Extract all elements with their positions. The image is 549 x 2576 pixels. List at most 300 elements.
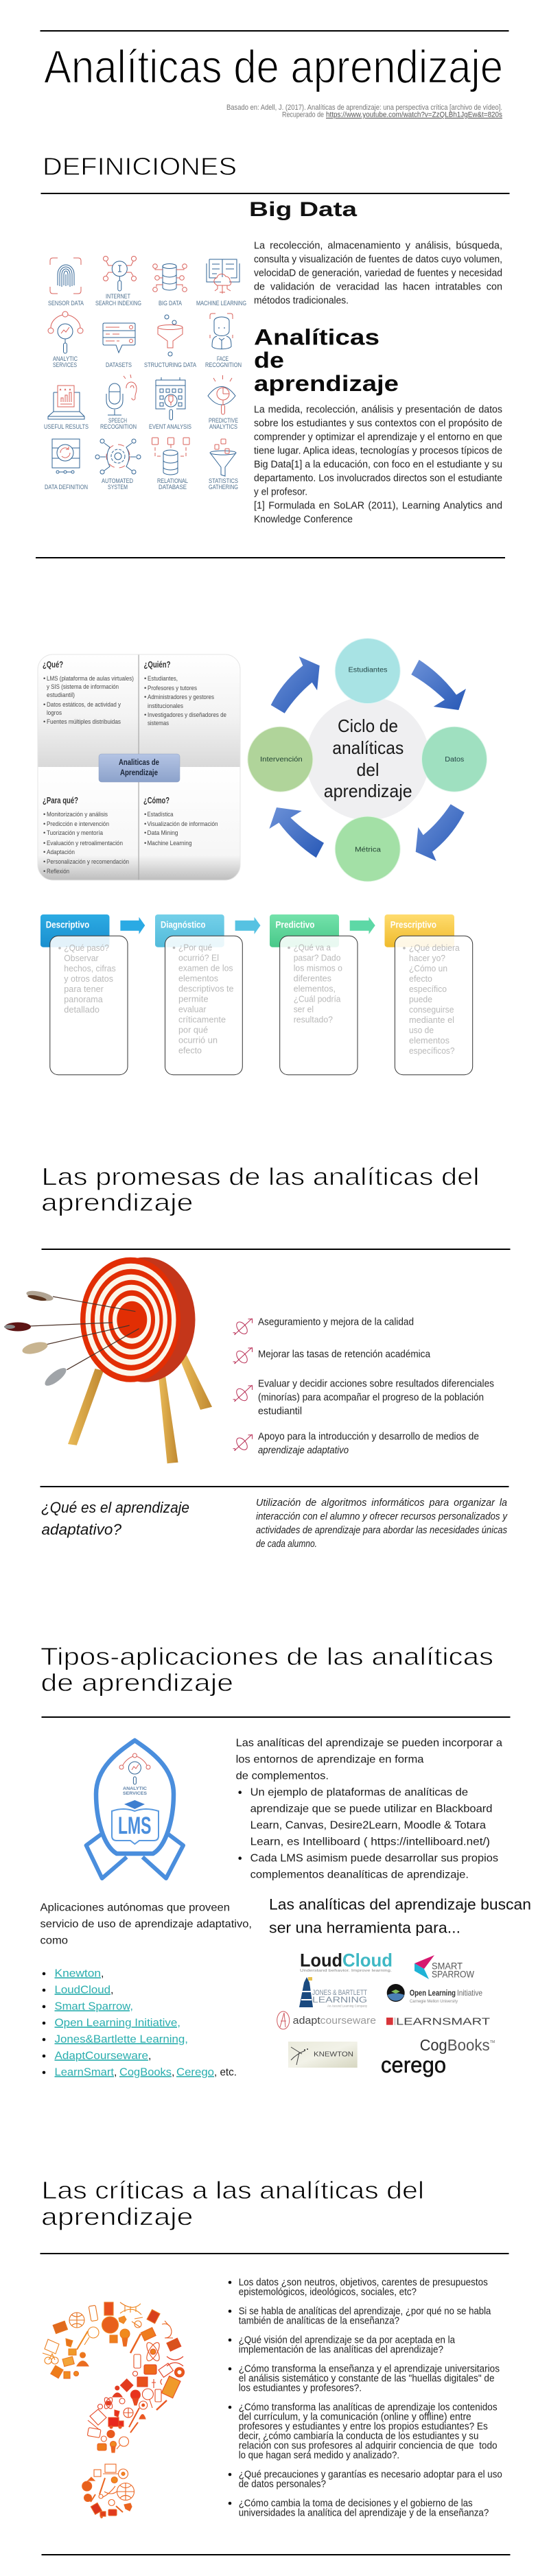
- list: adaptive learning services: CogBooks: [119, 2066, 172, 2078]
- icon: automated system: [95, 439, 141, 491]
- item: evaluar: Evaluar y decidir acciones sobre resultados diferenciales: [258, 1379, 494, 1390]
- arrow: intervención to estudiantes: [271, 657, 320, 713]
- item: datos neutros: [229, 2278, 488, 2298]
- icon: useful results: [44, 386, 89, 430]
- heading: las críticas: [41, 2176, 424, 2230]
- icon: relational database: [152, 438, 189, 491]
- icon: LMS badge: LMS: [118, 1812, 151, 1839]
- logo: open learning initiative: Carnegie Mellon University: [410, 2000, 458, 2004]
- quadrant: para qué: Personalización y recomendación: [47, 858, 129, 866]
- icon: speech recognition: SPEECH: [108, 417, 127, 424]
- logo: loudcloud: [300, 1950, 393, 1973]
- quadrant: qué: •: [43, 701, 45, 709]
- icon: event analysis: EVENT ANALYSIS: [149, 423, 191, 430]
- list: adaptive learning services: Jones&Bartlette Learning,: [55, 2033, 188, 2045]
- step: diagnóstico: evaluar: [178, 1004, 206, 1014]
- node: intervención: [248, 726, 313, 792]
- text: aprendizaje adaptativo definition: actividades de aprendizaje para abordar las necesidades únicas: [256, 1525, 507, 1536]
- logo: cogbooks: Books: [447, 2036, 490, 2054]
- quadrant: quién: •: [144, 711, 146, 719]
- step: diagnóstico: permite: [178, 995, 209, 1004]
- text: aplicaciones autónomas: servicio de uso de aprendizaje adaptativo,: [40, 1918, 252, 1930]
- logo: loudcloud: Cloud: [342, 1950, 393, 1971]
- text: aprendizaje adaptativo definition: de cada alumno.: [256, 1539, 317, 1550]
- arrow: descriptivo to diagnóstico: [120, 917, 145, 934]
- quadrant: para qué: •: [43, 858, 45, 866]
- step: predictivo: ser el: [294, 1004, 314, 1014]
- quadrant: cómo: •: [144, 829, 146, 837]
- icon: automated system: AUTOMATED: [102, 477, 133, 484]
- heading: analíticas de aprendizaje: Analíticas: [254, 325, 379, 350]
- heading: tipos-aplicaciones: Tipos-aplicaciones de las analíticas: [40, 1642, 493, 1670]
- step: diagnóstico: efecto: [178, 1045, 202, 1055]
- item: datos personales: ¿Qué precauciones y garantías es necesario adoptar para el uso: [239, 2470, 502, 2481]
- logo: adaptcourseware: [277, 2011, 376, 2029]
- item: evaluar: [258, 1379, 494, 1417]
- icon: event analysis: [149, 377, 191, 430]
- quadrant: quién: Estudiantes,: [148, 675, 178, 683]
- icon: speech recognition: [100, 375, 137, 430]
- text: analíticas en entornos de aprendizaje: Las analíticas del aprendizaje se pueden incorporar a: [236, 1738, 502, 1749]
- step: prescriptivo: ¿Qué debiera: [409, 943, 460, 953]
- item: huellas digitales: [229, 2363, 500, 2394]
- list: adaptive learning services: ,: [114, 2066, 117, 2078]
- item: analíticas de la enseñanza: [229, 2306, 491, 2326]
- step: descriptivo: [40, 914, 128, 1075]
- step: predictivo: diferentes: [294, 974, 331, 984]
- quadrant: qué: Fuentes múltiples distribuidas: [47, 718, 121, 726]
- text: big data definition: métodos tradicionales.: [254, 296, 349, 307]
- quadrant: quién: [144, 659, 226, 727]
- arrow: estudiantes to datos: [411, 660, 466, 710]
- node: intervención: Intervención: [260, 755, 303, 764]
- step: diagnóstico: elementos: [178, 974, 218, 984]
- item: analíticas de la enseñanza: Si se habla de analíticas del aprendizaje, ¿por qué no se habla: [239, 2306, 491, 2317]
- quadrant: cómo: ¿Cómo?: [143, 795, 170, 805]
- quadrant: qué: [43, 659, 134, 726]
- heading: herramienta: ser una herramienta para...: [269, 1919, 460, 1937]
- quadrant: cómo: Estadística: [147, 811, 174, 818]
- item: contenidos del currículum: del currículum, y la comunicación (online y offline) entre: [239, 2411, 471, 2422]
- text: analíticas en entornos de aprendizaje: complementos deanalíticas de aprendizaje.: [250, 1869, 469, 1881]
- quadrant: para qué: [43, 795, 129, 875]
- step: prescriptivo: efecto: [409, 974, 432, 984]
- quadrant: para qué: Reflexión: [47, 868, 69, 875]
- icon: big data: BIG DATA: [159, 300, 182, 307]
- item: evaluar: (minorías) para acompañar el progreso de la población: [258, 1393, 484, 1404]
- quadrant: quién: sistemas: [148, 720, 169, 727]
- logo: cogbooks: [420, 2036, 495, 2054]
- arrow: datos to métrica: [416, 804, 465, 861]
- icon: internet search indexing: INTERNET: [106, 293, 130, 300]
- item: gobierno de las universidades: ¿Cómo cambia la toma de decisiones y el gobierno de las: [239, 2498, 473, 2509]
- item: datos personales: [229, 2470, 502, 2490]
- item: contenidos del currículum: lo que hagan será medido y analizado?.: [239, 2450, 399, 2461]
- step: diagnóstico: ocurrió? El: [178, 954, 219, 963]
- text: aprendizaje adaptativo definition: Utilización de algoritmos informáticos para organizar la: [256, 1498, 507, 1509]
- icon: relational database: DATABASE: [159, 484, 187, 491]
- node: estudiantes: Estudiantes: [349, 665, 387, 674]
- icon: relational database: RELATIONAL: [157, 477, 188, 484]
- text: analíticas en entornos de aprendizaje: [236, 1738, 502, 1881]
- heading: las críticas: aprendizaje: [41, 2202, 194, 2230]
- logo: jones and bartlett: An Ascend Learning Company: [327, 2005, 368, 2007]
- list: adaptive learning services: ,: [172, 2066, 174, 2078]
- icon: predictive analytics: [208, 375, 238, 430]
- icon: LMS badge: [86, 1740, 183, 1878]
- item: huellas digitales: los estudiantes y profesores?.: [239, 2383, 362, 2394]
- text: aplicaciones autónomas: [40, 1902, 252, 1946]
- central circle: [306, 697, 430, 820]
- heading: qué es el aprendizaje adaptativo: adaptativo?: [41, 1521, 122, 1538]
- item: datos neutros: Los datos ¿son neutros, objetivos, carentes de presupuestos: [239, 2278, 488, 2289]
- icon: useful results: USEFUL RESULTS: [44, 423, 89, 430]
- logo: open learning initiative: Initiative: [457, 1988, 482, 1998]
- text: analíticas definition: Big Data[1] a la educación, con foco en el estudiante y su: [254, 460, 502, 471]
- step: predictivo: pasar? Dado: [294, 954, 340, 963]
- icon: internet search indexing: SEARCH INDEXING: [95, 300, 141, 307]
- list: adaptive learning services: AdaptCourseware: [55, 2050, 148, 2061]
- list: adaptive learning services: ,: [148, 2050, 151, 2061]
- chart: ciclo de analíticas del aprendizaje: [248, 638, 487, 882]
- text: analíticas definition: La medida, recolección, análisis y presentación de datos: [254, 405, 502, 416]
- icon: big data: [153, 263, 187, 307]
- quadrant: qué: y SIS (sistema de información: [47, 683, 119, 691]
- icon: internet search indexing: [95, 257, 141, 307]
- central circle: Ciclo de: [338, 716, 398, 736]
- heading: analíticas de aprendizaje: aprendizaje: [254, 371, 399, 396]
- quadrant: para qué: Predicción e intervención: [47, 820, 109, 828]
- node: métrica: [335, 816, 400, 882]
- item: contenidos del currículum: ¿Cómo transforma las analíticas de aprendizaje los contenidos: [239, 2402, 498, 2413]
- illustration: question mark of icons: [43, 2302, 184, 2518]
- logo: cogbooks: TM: [490, 2040, 495, 2044]
- step: descriptivo: ¿Qué pasó?: [64, 943, 109, 953]
- icon: statistics gathering: GATHERING: [209, 484, 238, 491]
- icon: analytic services: [48, 311, 83, 368]
- step: diagnóstico: por qué: [178, 1025, 208, 1035]
- quadrant: cómo: Machine Learning: [147, 840, 192, 847]
- source citation: Basado en: Adell, J. (2017). Analíticas de aprendizaje: una perspectiva crítica [archivo de vídeo].: [226, 104, 502, 112]
- text: analíticas en entornos de aprendizaje: de complementos.: [236, 1771, 329, 1782]
- list: adaptive learning services: ,: [101, 1968, 104, 1979]
- list: adaptive learning services: [43, 1968, 237, 2078]
- step: prescriptivo: uso de: [409, 1026, 434, 1035]
- item: apoyo: [258, 1432, 479, 1456]
- logos: [277, 1950, 495, 2077]
- icon: analytic services: SERVICES: [53, 362, 77, 368]
- step: prescriptivo: ¿Cómo un: [409, 964, 447, 973]
- node: datos: [421, 726, 487, 792]
- list: adaptive learning services: Smart Sparrow,: [55, 2000, 133, 2012]
- text: big data definition: velocidaD de generación, variedad de fuentes y necesidad: [254, 268, 502, 279]
- step: diagnóstico: [155, 914, 242, 1075]
- quadrant: quién: Investigadores y diseñadores de: [148, 711, 226, 719]
- step: diagnóstico: críticamente: [178, 1015, 226, 1025]
- central circle: aprendizaje: [324, 781, 412, 801]
- text: big data definition: consulta y visualización de fuentes de datos cuyo volumen,: [254, 255, 502, 265]
- central circle: del: [357, 759, 379, 780]
- logo: knewton: [288, 2042, 358, 2068]
- quadrant: qué: Datos estáticos, de actividad y: [47, 701, 121, 709]
- heading: tipos-aplicaciones: [40, 1642, 493, 1697]
- text: analíticas en entornos de aprendizaje: Learn, Canvas, Desire2Learn, Moodle & Totara: [250, 1820, 486, 1832]
- quadrant: quién: ¿Quién?: [144, 659, 171, 670]
- title rule: [40, 30, 509, 32]
- icon: sensor data: [48, 258, 84, 307]
- text: big data definition: La recolección, almacenamiento y análisis, búsqueda,: [254, 241, 502, 252]
- logo: loudcloud: Loud: [300, 1950, 342, 1971]
- text: analíticas definition: comprender y optimizar el aprendizaje y el entorno en que: [254, 432, 502, 443]
- heading: qué es el aprendizaje adaptativo: [41, 1499, 189, 1538]
- quadrant: qué: •: [43, 718, 45, 726]
- quadrant: quién: Administradores y gestores: [148, 694, 214, 701]
- icon: machine learning: [196, 259, 246, 307]
- quadrant: cómo: [143, 795, 218, 847]
- icon: datasets: DATASETS: [106, 362, 132, 368]
- quadrant: cómo: Visualización de información: [147, 820, 218, 828]
- heading: definiciones: DEFINICIONES: [43, 152, 237, 180]
- icon: structuring data: [144, 315, 196, 368]
- quadrant: para qué: Adaptación: [47, 849, 75, 856]
- logo: smart sparrow: SMART: [432, 1961, 463, 1972]
- list: adaptive learning services: LoudCloud: [55, 1984, 110, 1996]
- icon: data definition: [45, 439, 88, 491]
- logo: knewton: KNEWTON: [314, 2051, 353, 2059]
- item: gobierno de las universidades: [229, 2498, 489, 2518]
- icon: datasets: [103, 323, 135, 368]
- heading: las críticas: Las críticas a las analíticas del: [41, 2176, 424, 2204]
- quadrant: para qué: •: [43, 811, 45, 818]
- text: aplicaciones autónomas: como: [40, 1935, 68, 1946]
- step: prescriptivo: mediante el: [409, 1015, 454, 1025]
- heading: tipos-aplicaciones: de aprendizaje: [41, 1668, 233, 1697]
- icon: data definition: DATA DEFINITION: [45, 484, 88, 491]
- item: analíticas de la enseñanza: también de analíticas de la enseñanza?: [239, 2315, 399, 2326]
- icon: face recognition: FACE: [217, 355, 229, 362]
- quadrant: para qué: •: [43, 868, 45, 875]
- center label: analíticas de aprendizaje: Analiticas de: [119, 759, 159, 767]
- process: tipos de analítica: [40, 914, 473, 1075]
- arrow: diagnóstico to predictivo: [235, 917, 261, 934]
- text: analíticas definition: [1] Formulada en SoLAR (2011), Learning Analytics and: [254, 501, 502, 512]
- icon grid: big data concepts: [44, 257, 246, 491]
- item: visión del aprendizaje: implementación de las analíticas del aprendizaje?: [239, 2345, 443, 2356]
- step: predictivo: [270, 914, 358, 1075]
- panel: qué quién para qué cómo quadrant: [38, 654, 240, 880]
- quadrant: quién: •: [144, 675, 146, 683]
- quadrant: para qué: Evaluación y retroalimentación: [47, 840, 123, 847]
- source citation: [226, 104, 502, 119]
- heading: analíticas de aprendizaje: de: [254, 348, 284, 373]
- central circle: analíticas: [332, 737, 404, 758]
- text: analíticas definition: tiene lugar. Aplica ideas, tecnologías y procesos típicos de: [254, 446, 502, 457]
- illustration: target with arrows: [4, 1257, 212, 1463]
- icon: structuring data: STRUCTURING DATA: [144, 362, 196, 368]
- icon: statistics gathering: [209, 439, 238, 491]
- logo: cogbooks: Cog: [420, 2036, 447, 2054]
- text: analíticas en entornos de aprendizaje: Learn, es Intelliboard ( https://intelliboard.net/): [250, 1836, 490, 1848]
- center label: analíticas de aprendizaje: [99, 754, 180, 782]
- quadrant: para qué: •: [43, 849, 45, 856]
- step: diagnóstico: ocurrió un: [178, 1036, 218, 1045]
- quadrant: para qué: •: [43, 840, 45, 847]
- logo: learnsmart: LEARNSMART: [396, 2016, 490, 2028]
- logo: adaptcourseware: courseware: [320, 2015, 376, 2026]
- quadrant: qué: estudiantil): [47, 692, 75, 699]
- step: predictivo: ¿Cuál podría: [294, 995, 340, 1004]
- icon: sensor data: SENSOR DATA: [48, 300, 84, 307]
- list: preguntas críticas: [229, 2278, 502, 2518]
- list: adaptive learning services: , etc.: [214, 2066, 237, 2078]
- item: contenidos del currículum: relación con sus profesores al adquirir conciencia de que todo: [239, 2440, 498, 2451]
- icon: statistics gathering: STATISTICS: [209, 477, 238, 484]
- step: prescriptivo: Prescriptivo: [390, 919, 436, 930]
- text: analíticas definition: departamento. Los involucrados directos son el estudiante: [254, 473, 502, 484]
- step: descriptivo: hechos, cifras: [64, 964, 116, 973]
- list: adaptive learning services: ,: [110, 1984, 113, 1996]
- heading: big data: Big Data: [249, 198, 357, 221]
- list: promesas: [233, 1317, 494, 1456]
- quadrant: quién: institucionales: [148, 702, 183, 710]
- heading: analíticas de aprendizaje: [254, 325, 399, 396]
- heading: las promesas: Las promesas de las analíticas del: [41, 1162, 479, 1190]
- step: prescriptivo: elementos: [409, 1036, 449, 1045]
- step: descriptivo: Descriptivo: [46, 919, 89, 930]
- item: visión del aprendizaje: [229, 2335, 456, 2356]
- node: métrica: Métrica: [355, 846, 381, 854]
- logo: smart sparrow: SPARROW: [432, 1969, 474, 1980]
- quadrant: qué: LMS (plataforma de aulas virtuales): [47, 675, 134, 683]
- step: descriptivo: y otros datos: [64, 974, 113, 984]
- text: big data definition: [254, 241, 502, 307]
- source citation: Recuperado de: [282, 111, 324, 119]
- logo: open learning initiative: [387, 1984, 482, 2004]
- step: prescriptivo: puede: [409, 995, 432, 1004]
- step: diagnóstico: examen de los: [178, 963, 233, 973]
- logo: jones and bartlett: LEARNING: [312, 1996, 367, 2005]
- quadrant: para qué: •: [43, 829, 45, 837]
- step: predictivo: elementos,: [294, 984, 336, 993]
- icon: predictive analytics: PREDICTIVE: [209, 417, 238, 424]
- text: analíticas definition: sobre los estudiantes y sus contextos con el propósito de: [254, 418, 502, 429]
- step: diagnóstico: Diagnóstico: [161, 919, 206, 930]
- step: descriptivo: detallado: [64, 1005, 100, 1015]
- text: analíticas en entornos de aprendizaje: los entornos de aprendizaje en forma: [236, 1754, 424, 1766]
- node: estudiantes: [335, 638, 400, 704]
- item: contenidos del currículum: decir, ¿cómo cambiaría la conducta de los estudiantes y su: [239, 2431, 478, 2442]
- list: adaptive learning services: LearnSmart: [55, 2066, 115, 2078]
- item: contenidos del currículum: profesores y estudiantes y entre los propios estudiantes? Es: [239, 2421, 488, 2432]
- list: adaptive learning services: Cerego: [176, 2066, 214, 2078]
- icon: analytic services: ANALYTIC: [53, 355, 78, 362]
- text: analíticas definition: y el profesor.: [254, 487, 307, 498]
- text: analíticas definition: Knowledge Conference: [254, 515, 353, 525]
- list: adaptive learning services: Open Learning Initiative,: [55, 2017, 180, 2029]
- center label: analíticas de aprendizaje: Aprendizaje: [120, 769, 158, 777]
- quadrant: cómo: •: [144, 820, 146, 828]
- step: prescriptivo: [384, 914, 473, 1075]
- item: datos personales: de datos personales?: [239, 2479, 326, 2490]
- item: gobierno de las universidades: universidades la analítica del aprendizaje y de la enseñanza?: [239, 2507, 489, 2518]
- step: prescriptivo: específico: [409, 984, 447, 994]
- text: analíticas en entornos de aprendizaje: Un ejemplo de plataformas de analíticas de: [250, 1787, 468, 1799]
- quadrant: qué: •: [43, 675, 45, 683]
- arrow: métrica to intervención: [269, 807, 324, 858]
- step: descriptivo: Observar: [64, 954, 99, 963]
- item: huellas digitales: el análisis sistemático y constante de las "huellas digitales" de: [239, 2373, 494, 2384]
- logo: jones and bartlett: JONES & BARTLETT: [312, 1989, 367, 1997]
- text: aplicaciones autónomas: Aplicaciones autónomas que proveen: [40, 1902, 230, 1913]
- quadrant: quién: •: [144, 685, 146, 692]
- item: calidad: Aseguramiento y mejora de la calidad: [258, 1317, 414, 1328]
- item: apoyo: aprendizaje adaptativo: [258, 1445, 349, 1456]
- step: prescriptivo: específicos?: [409, 1046, 455, 1056]
- text: aprendizaje adaptativo definition: [256, 1498, 508, 1550]
- quadrant: para qué: Monitorización y análisis: [47, 811, 108, 818]
- quadrant: para qué: •: [43, 820, 45, 828]
- quadrant: cómo: Data Mining: [147, 829, 178, 837]
- node: datos: Datos: [445, 755, 464, 764]
- icon: face recognition: [205, 314, 242, 368]
- step: descriptivo: para tener: [64, 984, 104, 994]
- step: predictivo: los mismos o: [294, 963, 342, 973]
- logo: jones and bartlett: [299, 1977, 368, 2007]
- text: analíticas definition: [254, 405, 502, 525]
- logo: smart sparrow: [414, 1955, 474, 1980]
- quadrant: cómo: •: [144, 811, 146, 818]
- item: contenidos del currículum: [229, 2402, 498, 2461]
- item: apoyo: Apoyo para la introducción y desarrollo de medios de: [258, 1432, 479, 1443]
- item: huellas digitales: ¿Cómo transforma la enseñanza y el aprendizaje universitarios: [239, 2363, 500, 2374]
- heading: las promesas: [41, 1162, 479, 1216]
- logo: cerego: cerego: [381, 2053, 446, 2077]
- item: visión del aprendizaje: ¿Qué visión del aprendizaje se da por aceptada en la: [239, 2335, 456, 2346]
- step: descriptivo: panorama: [64, 995, 103, 1004]
- heading: herramienta: Las analíticas del aprendizaje buscan: [269, 1895, 531, 1913]
- item: retención: Mejorar las tasas de retención académica: [258, 1349, 431, 1360]
- list: adaptive learning services: Knewton: [55, 1968, 101, 1979]
- step: predictivo: resultado?: [294, 1015, 333, 1025]
- text: analíticas en entornos de aprendizaje: Cada LMS asimism puede desarrollar sus propios: [250, 1853, 498, 1865]
- text: big data definition: de validación de veracidad las hacen intratables con: [254, 282, 502, 293]
- quadrant: cómo: •: [144, 840, 146, 847]
- step: prescriptivo: conseguirse: [409, 1005, 454, 1015]
- icon: predictive analytics: ANALYTICS: [209, 423, 237, 430]
- heading: las promesas: aprendizaje: [41, 1188, 194, 1216]
- quadrant: quién: •: [144, 694, 146, 701]
- logo: learnsmart: [386, 2016, 490, 2028]
- icon: bow and arrow: [233, 1347, 253, 1365]
- step: diagnóstico: ¿Por qué: [178, 943, 212, 952]
- logo: open learning initiative: Open Learning: [410, 1988, 456, 1998]
- heading: qué es el aprendizaje adaptativo: ¿Qué es el aprendizaje: [41, 1499, 189, 1516]
- logo: adaptcourseware: adapt: [293, 2015, 321, 2026]
- heading: herramienta: [269, 1895, 531, 1937]
- icon: machine learning: MACHINE LEARNING: [196, 300, 246, 307]
- icon: bow and arrow: [233, 1385, 253, 1403]
- step: diagnóstico: descriptivos te: [178, 984, 234, 993]
- quadrant: para qué: Tuorización y mentoría: [47, 829, 104, 837]
- icon: bow and arrow: [233, 1319, 253, 1336]
- icon: face recognition: RECOGNITION: [205, 362, 242, 368]
- icon: LMS badge: SERVICES: [123, 1791, 148, 1796]
- item: evaluar: estudiantil: [258, 1406, 302, 1417]
- item: datos neutros: epistemológicos, ideológicos, sociales, etc?: [239, 2287, 417, 2298]
- step: prescriptivo: hacer yo?: [409, 954, 445, 963]
- step: predictivo: ¿Qué va a: [294, 943, 331, 952]
- text: analíticas en entornos de aprendizaje: aprendizaje que se puede utilizar en Blackboard: [250, 1804, 493, 1815]
